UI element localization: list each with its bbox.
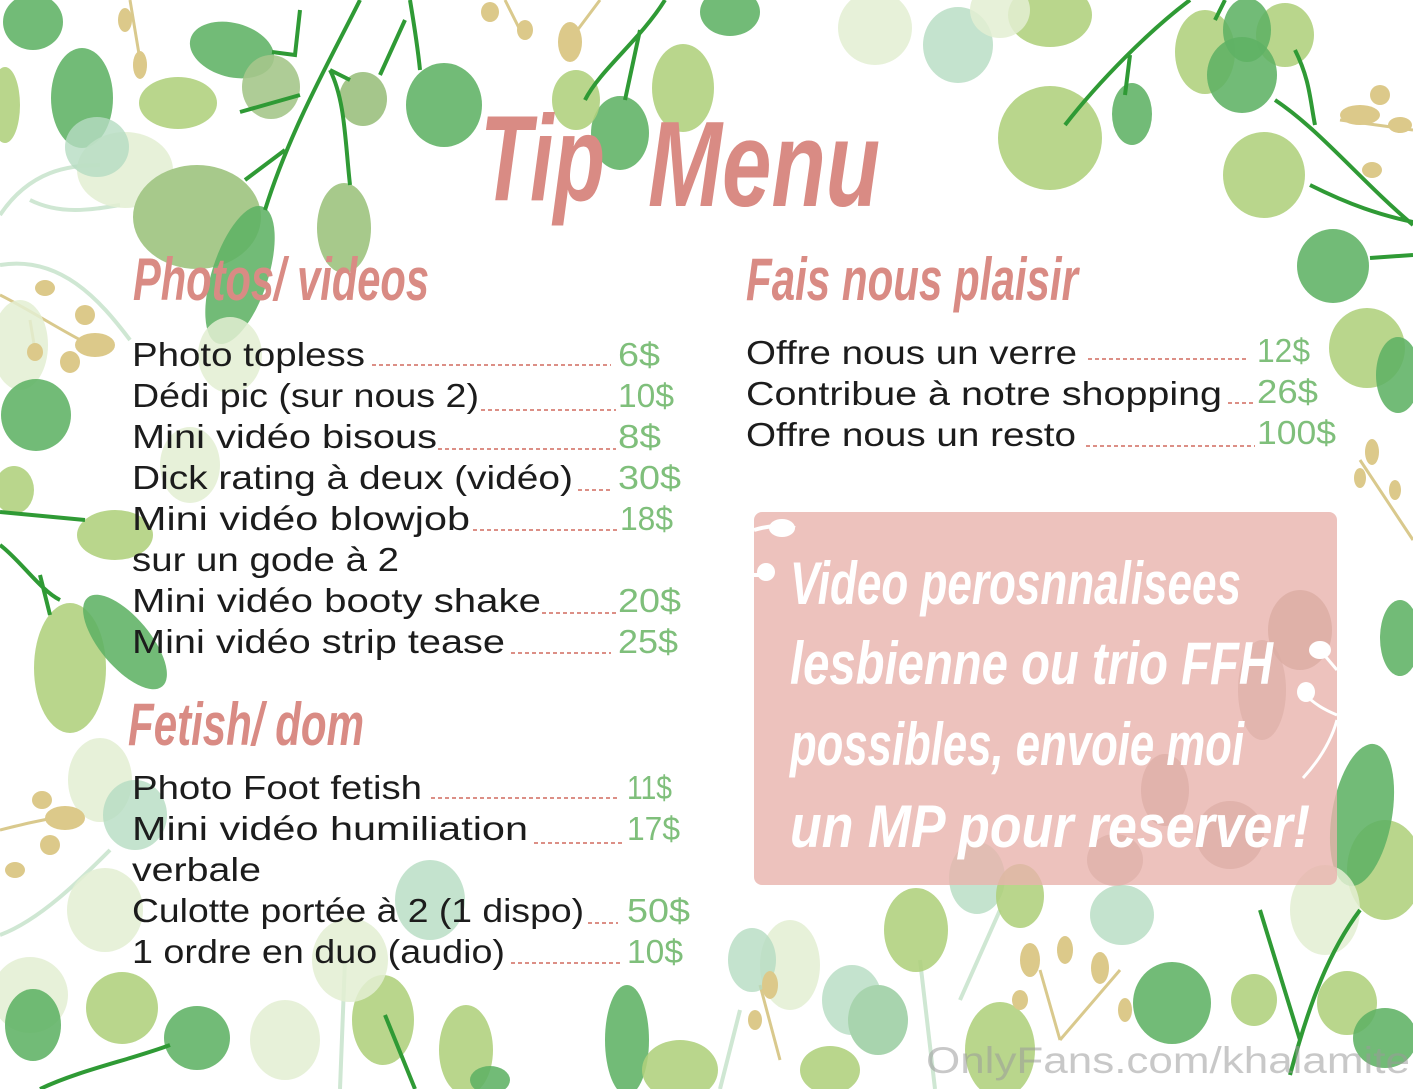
list: fetish and dom prices: verbale xyxy=(132,851,261,888)
list: fais nous plaisir prices: 100$ xyxy=(1257,414,1336,451)
watermark: OnlyFans.com/khalamite xyxy=(926,1040,1410,1081)
list: fetish and dom prices: 50$ xyxy=(627,892,690,929)
list: photos and videos prices xyxy=(132,336,681,660)
list: photos and videos prices: sur un gode à 2 xyxy=(132,541,399,578)
title xyxy=(480,90,880,232)
heading: fetish/dom: Fetish/ dom xyxy=(128,691,364,758)
callout: personalised videos: possibles, envoie moi xyxy=(789,711,1245,778)
list: fetish and dom prices: 11$ xyxy=(627,769,672,806)
list: photos and videos prices: 18$ xyxy=(620,500,673,537)
list: fais nous plaisir prices: Contribue à notre shopping xyxy=(746,375,1222,412)
list: photos and videos prices: Mini vidéo strip tease xyxy=(132,623,505,660)
list: photos and videos prices: 10$ xyxy=(618,377,674,414)
list: fetish and dom prices: Culotte portée à 2 (1 dispo) xyxy=(132,892,584,929)
list: fais nous plaisir prices: Offre nous un verre xyxy=(746,334,1077,371)
list: photos and videos prices: 30$ xyxy=(618,459,681,496)
list: photos and videos prices: 6$ xyxy=(618,336,660,373)
list: photos and videos prices: 20$ xyxy=(618,582,681,619)
list: photos and videos prices: Photo topless xyxy=(132,336,365,373)
list: photos and videos prices: 25$ xyxy=(618,623,678,660)
callout: personalised videos: lesbienne ou trio FFH xyxy=(790,630,1274,697)
heading: fais nous plaisir: Fais nous plaisir xyxy=(746,246,1081,313)
list: fais nous plaisir prices: 26$ xyxy=(1257,373,1318,410)
list: photos and videos prices: Mini vidéo bisous xyxy=(132,418,437,455)
list: fetish and dom prices: 1 ordre en duo (audio) xyxy=(132,933,505,970)
list: photos and videos prices: Mini vidéo booty shake xyxy=(132,582,541,619)
list: fais nous plaisir prices: Offre nous un resto xyxy=(746,416,1076,453)
callout: personalised videos: un MP pour reserver! xyxy=(790,793,1310,860)
list: fetish and dom prices: 17$ xyxy=(627,810,680,847)
list: photos and videos prices: Dédi pic (sur nous 2) xyxy=(132,377,479,414)
list: fais nous plaisir prices: 12$ xyxy=(1257,332,1310,369)
list: fais nous plaisir prices xyxy=(746,332,1336,453)
list: photos and videos prices: Mini vidéo blowjob xyxy=(132,500,470,537)
list: fetish and dom prices: Photo Foot fetish xyxy=(132,769,422,806)
list: fetish and dom prices xyxy=(132,769,690,970)
list: photos and videos prices: Dick rating à deux (vidéo) xyxy=(132,459,573,496)
title: Menu xyxy=(648,96,880,232)
list: fetish and dom prices: 10$ xyxy=(627,933,683,970)
list: photos and videos prices: 8$ xyxy=(618,418,661,455)
heading: photos/videos: Photos/ videos xyxy=(133,246,429,313)
list: fetish and dom prices: Mini vidéo humiliation xyxy=(132,810,528,847)
callout: personalised videos xyxy=(754,512,1337,886)
title: Tip xyxy=(480,90,605,226)
callout: personalised videos: Video perosnnalisees xyxy=(790,550,1241,617)
